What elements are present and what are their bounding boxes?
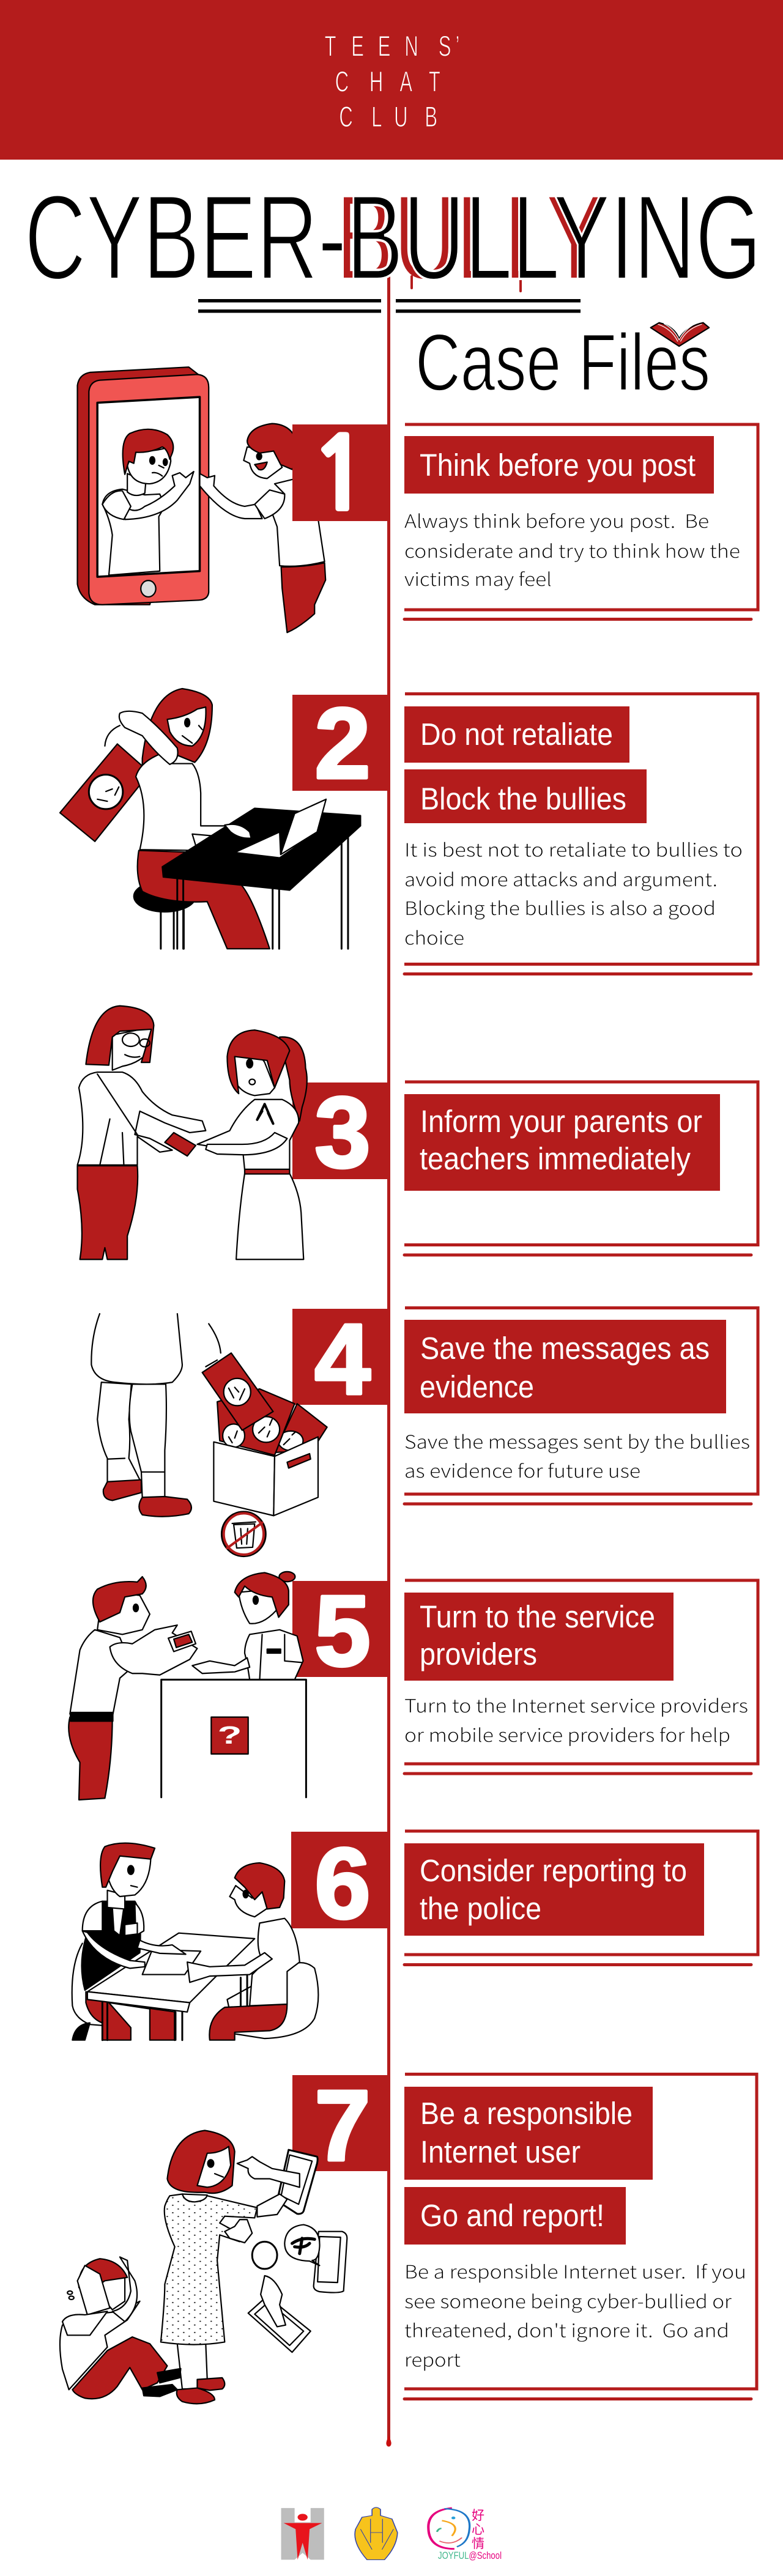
heading box: Think before you post <box>420 448 696 483</box>
magnifier and lower tablet <box>248 2241 311 2352</box>
smiling boy <box>200 424 325 632</box>
number block 5 <box>292 1575 388 1687</box>
heading box: Inform your parents or <box>420 1104 702 1139</box>
heading box: teachers immediately <box>420 1141 691 1176</box>
heading box <box>404 1843 704 1936</box>
icon: open book <box>651 323 709 346</box>
reporting student <box>187 1863 300 2040</box>
illustration: step 3 telling a teacher <box>78 1006 307 1259</box>
body text: report <box>404 2345 461 2372</box>
number block 2 <box>292 687 388 799</box>
logo: red figure <box>281 2508 324 2559</box>
student girl <box>197 1030 307 1259</box>
customer <box>69 1577 197 1800</box>
body text: see someone being cyber-bullied or <box>404 2287 732 2314</box>
seated girl <box>119 689 270 949</box>
standing person <box>91 1313 221 1517</box>
body text: Always think before you post. Be <box>404 506 709 533</box>
body text <box>404 1691 748 1747</box>
heading box: Save the messages as <box>420 1331 710 1366</box>
heading box <box>404 436 714 494</box>
reflected figure <box>102 429 194 575</box>
sitting victim <box>60 2257 181 2399</box>
heading box: be a responsible internet user: Be a responsible <box>420 2096 633 2131</box>
heading box: block the bullies: Block the bullies <box>420 782 626 816</box>
body text: threatened, don't ignore it. Go and <box>404 2315 729 2342</box>
counter with question sign <box>161 1679 306 1797</box>
heading box: be a responsible internet user <box>404 2087 653 2180</box>
illustration: step 4 saving evidence <box>91 1313 327 1556</box>
body text: considerate and try to think how the <box>404 536 740 563</box>
body text: Blocking the bullies is also a good <box>404 894 716 920</box>
heading box: evidence <box>420 1369 534 1404</box>
shown phone <box>165 1133 196 1156</box>
body text <box>404 1427 750 1483</box>
body text: or mobile service providers for help <box>404 1720 730 1747</box>
logo: yellow hands <box>355 2508 398 2559</box>
body text <box>404 835 743 950</box>
logo: joyful at school: 心 <box>472 2523 484 2537</box>
number block 1: 1 <box>310 426 371 525</box>
body text <box>404 506 740 591</box>
timeline line with drop <box>386 276 392 2446</box>
header banner: CLUB <box>339 102 437 133</box>
number block 7 <box>292 2070 388 2182</box>
heading box <box>404 1593 674 1681</box>
header banner: CHAT <box>335 66 440 98</box>
number block 4: 4 <box>314 1303 371 1415</box>
heading box: providers <box>420 1637 537 1671</box>
panel: step 1 <box>404 424 758 619</box>
tablet with pointing arm <box>225 2150 317 2243</box>
police officer <box>72 1843 176 2040</box>
logo: joyful at school: JOYFUL@School <box>438 2550 502 2561</box>
table <box>83 1931 254 2040</box>
illustration: step 6 reporting to police <box>72 1843 318 2040</box>
title double rule <box>198 299 581 313</box>
heading box <box>404 1094 720 1191</box>
teacher <box>78 1006 206 1259</box>
illustration: step 5 service counter <box>69 1572 306 1800</box>
number block 2: 2 <box>314 687 371 799</box>
panel: step 3 <box>404 1082 758 1255</box>
number block 4 <box>292 1303 388 1415</box>
heading box: block the bullies <box>404 769 647 823</box>
body text: victims may feel <box>404 564 552 591</box>
number block 3: 3 <box>314 1076 371 1188</box>
phone <box>78 367 209 605</box>
body text: Save the messages sent by the bullies <box>404 1427 750 1454</box>
counter with question sign: ? <box>218 1721 242 1749</box>
heading box: the police <box>420 1891 541 1926</box>
header banner: TEENS’ <box>325 31 459 62</box>
angry card <box>60 725 150 842</box>
body text <box>404 2257 746 2372</box>
number block 7: 7 <box>314 2070 371 2182</box>
heading box: go and report <box>404 2187 626 2245</box>
student chair <box>227 1963 318 2038</box>
storage box <box>213 1437 318 1516</box>
number block 6 <box>291 1827 388 1939</box>
woman in dotted dress <box>161 2130 257 2404</box>
panel: step 6 <box>404 1831 758 1964</box>
phone and speech bubble <box>284 2225 347 2293</box>
icon: no trash <box>221 1512 265 1556</box>
panel: step 2 <box>404 694 758 974</box>
service staff <box>192 1572 303 1679</box>
body text: Turn to the Internet service providers <box>404 1691 748 1718</box>
body text: Be a responsible Internet user. If you <box>404 2257 746 2284</box>
heading box: do not retaliate <box>404 706 629 763</box>
heading box: do not retaliate: Do not retaliate <box>420 717 613 752</box>
body text: choice <box>404 923 464 950</box>
logo: joyful at school: 好 <box>472 2509 484 2523</box>
illustration: step 7 responsible user <box>60 2130 347 2404</box>
logo: joyful at school: 情 <box>472 2537 484 2551</box>
body text: avoid more attacks and argument. <box>404 865 718 892</box>
title: BULLY <box>336 170 603 305</box>
logo: joyful at school <box>428 2508 502 2561</box>
heading box: be a responsible internet user: Internet user <box>420 2134 581 2169</box>
illustration: step 2 girl blocking at desk <box>60 689 360 949</box>
desk and laptop <box>162 799 360 949</box>
heading box <box>404 1320 726 1413</box>
body text: It is best not to retaliate to bullies to <box>404 835 743 862</box>
body text: as evidence for future use <box>404 1456 640 1483</box>
heading box: Consider reporting to <box>420 1853 687 1888</box>
evidence cards <box>202 1353 327 1455</box>
number block 6: 6 <box>314 1827 371 1939</box>
panel: step 7 <box>404 2074 757 2399</box>
number block 5: 5 <box>314 1575 371 1687</box>
number block 3 <box>292 1076 388 1188</box>
panel: step 4 <box>404 1308 758 1504</box>
illustration: step 1 mirror phone <box>78 367 325 632</box>
heading box: Turn to the service <box>420 1599 655 1634</box>
panel: step 5 <box>404 1580 758 1774</box>
header banner <box>0 0 783 160</box>
heading box: go and report: Go and report! <box>420 2198 604 2233</box>
number block 1 <box>292 424 388 525</box>
